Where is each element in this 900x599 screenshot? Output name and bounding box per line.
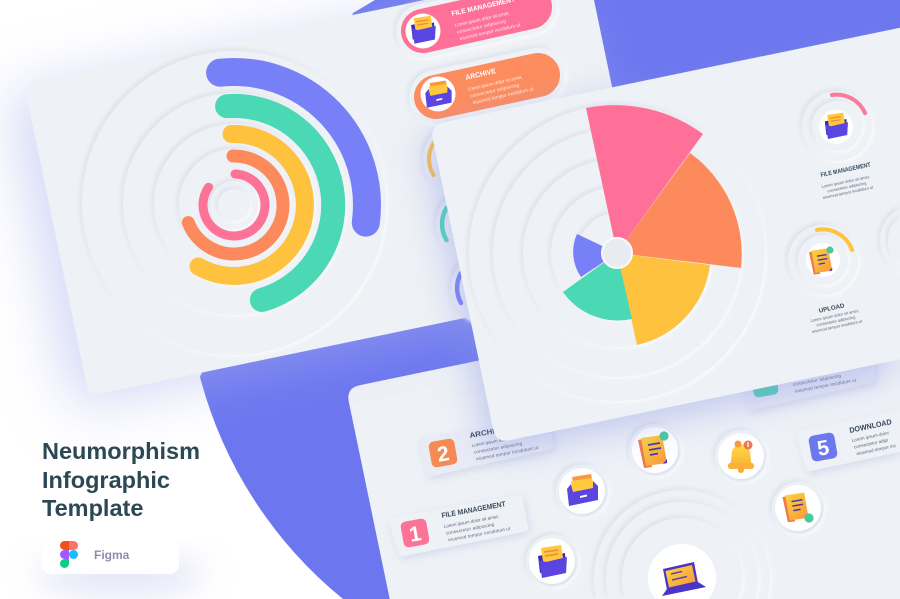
heading: upload: UPLOAD (818, 302, 846, 315)
text: file management body: Lorem ipsum dolor sit amet, (454, 11, 510, 29)
text: upload description: eiusmod tempor incididunt ut (811, 318, 863, 334)
card: 4 partly hidden (745, 352, 875, 410)
text: upload description (809, 308, 863, 334)
text: archive body: Lorem ipsum dolor sit amet, (471, 433, 527, 448)
icon: partly visible third bubble (880, 208, 900, 272)
card: 2 archive (419, 420, 553, 476)
text: file management body: consectetur adipiscing (457, 18, 507, 36)
icon: folder bubble (526, 535, 578, 587)
text: file management description: Lorem ipsum dolor sit amet, (821, 174, 870, 189)
text: card 4 body: eiusmod tempor incididunt ut (795, 377, 857, 394)
panel: pie chart slide (432, 28, 900, 441)
text: download body: eiusmod tempor inc (856, 443, 897, 456)
badge: 4 (750, 369, 779, 398)
heading: archive: ARCHIVE (469, 425, 506, 440)
chart: pink arc (203, 174, 265, 236)
text: file management body (443, 512, 511, 543)
text: file management description: eiusmod tempor incididunt ut (822, 184, 874, 200)
icon: archive tray bubble (556, 465, 608, 517)
figma badge (42, 532, 179, 574)
icon: download document bubble (772, 482, 824, 534)
pill: archive (420, 66, 538, 112)
chart: orange arc (188, 156, 283, 254)
text: upload description: consectetur adipiscing (816, 314, 856, 327)
badge: 2: 2 (436, 442, 451, 467)
icon: bell bubble (715, 430, 767, 482)
heading: file management: FILE MANAGEMENT (820, 161, 871, 179)
text: download body (851, 429, 897, 457)
title: Neumorphism (42, 438, 200, 464)
heading: archive: ARCHIVE (464, 66, 497, 82)
panel: bottom slide with icons and numbered cards (348, 273, 900, 599)
text: file management body: Lorem ipsum dolor sit amet, (443, 514, 499, 529)
chart: green arc (227, 106, 333, 300)
text: archive body: Lorem ipsum dolor sit amet, (467, 75, 523, 93)
text: file management body: eiusmod tempor incididunt ut (448, 526, 511, 542)
text: file management body (454, 9, 522, 43)
title: Infographic (42, 467, 170, 493)
chart: yellow arc (198, 134, 305, 276)
panel: radial arc chart slide (26, 0, 652, 394)
text: upload description: Lorem ipsum dolor sit amet, (810, 308, 859, 323)
icon: upload document bubble (629, 424, 681, 476)
card: 5 download (797, 409, 900, 471)
text: file management description (820, 174, 874, 200)
chart: blue arc (220, 72, 367, 223)
chart: concentric neumorphic rings (82, 51, 386, 355)
chart: polar pie wedges (563, 105, 742, 345)
badge: 5: 5 (816, 436, 831, 461)
chart: concentric rings around laptop (594, 490, 770, 599)
heading: file management: FILE MANAGEMENT (441, 499, 507, 520)
pill: file management (406, 0, 530, 49)
label: figma: Figma (94, 548, 130, 562)
text: archive body (471, 431, 539, 462)
text: archive body: eiusmod tempor incididunt ut (476, 445, 539, 461)
card: 1 file management (389, 495, 528, 556)
icon: figma logo (60, 541, 78, 568)
text: file management body: consectetur adipiscing (446, 522, 495, 536)
text: download body: Lorem ipsum dolor (851, 430, 890, 443)
text: card 4 body: consectetur adipiscing (792, 373, 842, 387)
icon: partly hidden yellow progress ring (423, 122, 497, 196)
text: archive body: consectetur adipiscing (474, 441, 523, 455)
chart: concentric rings behind pie (469, 105, 765, 401)
icon: laptop bubble (648, 544, 716, 599)
text: archive body (467, 73, 535, 107)
icon: partly hidden blue progress ring (451, 251, 525, 325)
title: Template (42, 495, 143, 521)
text: download body: consectetur adipi (854, 438, 889, 450)
icon: partly hidden teal progress ring (436, 187, 510, 261)
title (42, 438, 200, 521)
heading: download: DOWNLOAD (849, 417, 893, 435)
icon: upload progress bubble (788, 225, 858, 295)
text: archive body: eiusmod tempor incididunt ut (472, 86, 535, 106)
text: card 4 body (792, 370, 857, 394)
purple backdrop shape (200, 0, 900, 599)
text: file management body: eiusmod tempor incididunt ut (459, 22, 522, 42)
text: archive body: consectetur adipiscing (470, 82, 520, 100)
text: file management description: consectetur adipiscing (827, 180, 867, 193)
badge: 1: 1 (408, 522, 423, 547)
icon: file management progress bubble (802, 91, 872, 161)
soft shadow below figma badge (35, 557, 205, 593)
